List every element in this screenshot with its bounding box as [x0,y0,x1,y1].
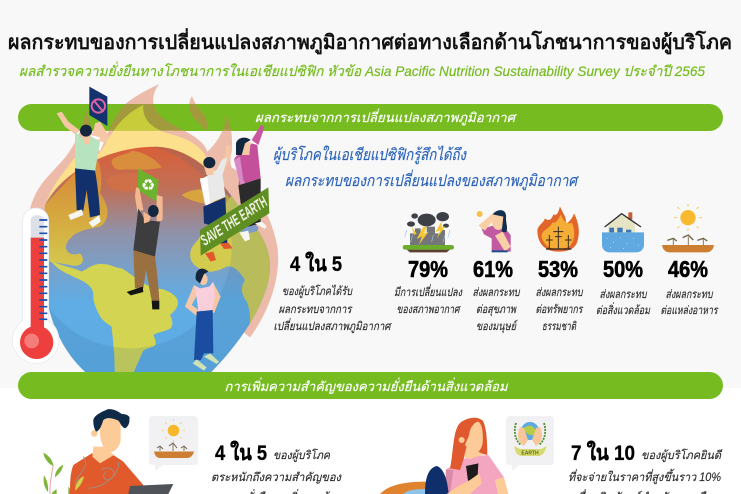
person: dark shirt with recycle sign [127,168,163,309]
stat: 50%: ต่อสิ่งแวดล้อม [596,302,651,317]
heading: consumers in Asia Pacific: ผลกระทบของการเปลี่ยนแปลงของสภาพภูมิอากาศ [285,169,579,191]
stat: 61%: ส่งผลกระทบ [472,287,521,299]
text: 7 in 10 willing to pay: 7 ใน 10 [571,440,635,465]
bubble: earth in hands: EARTH [521,450,539,456]
text: 4 in 5 aware: 4 ใน 5 [215,440,267,465]
icon: sun and dry crops [662,204,714,252]
person: pink top [185,269,221,371]
stat: 61% [472,256,521,333]
text: 4 in 5 aware: ของผู้บริโภค [273,448,331,462]
stat: 4 in 5: 4 ใน 5 [290,251,342,276]
person: magenta sweater [234,125,267,241]
bubble: dry crops [149,416,198,471]
stat: 61%: 61% [473,256,513,282]
person: green shirt with sign [57,87,109,227]
section banner: climate impact: ผลกระทบจากการเปลี่ยนแปลงสภาพภูมิอากาศ [255,108,518,126]
illustration: man with laptop and plant [43,409,173,494]
section banner: climate impact [18,104,723,131]
icon: forest fire [537,206,579,252]
bubble: earth in hands [506,416,554,471]
stat: 53% [536,256,584,333]
stat: 61%: ต่อสุขภาพ [476,304,517,316]
flames [29,84,278,337]
title: ผลกระทบของการเปลี่ยนแปลงสภาพภูมิอากาศต่อทางเลือกด้านโภชนาการของผู้บริโภค [8,27,732,56]
stat: 50%: 50% [603,256,643,282]
stat: 4 in 5: ผลกระทบจากการ [278,304,353,316]
stat: 50% [596,256,651,317]
text: 7 in 10 willing to pay [568,440,723,494]
text: 7 in 10 willing to pay: ที่จะจ่ายในราคาที่สูงขึ้นราว 10% [568,468,721,484]
stat: 46%: ส่งผลกระทบ [666,289,714,301]
illustration: burning globe with protesters [12,84,278,377]
stat: 46% [660,256,719,317]
icon: flooded house [602,212,644,252]
stat: 53%: 53% [538,256,578,282]
stat: 53%: ต่อทรัพยากร [536,303,584,316]
illustration: woman with phone on sofa [380,418,508,494]
text: 7 in 10 willing to pay: ของผู้บริโภคยินดี [641,448,723,462]
stat: 46%: 46% [668,256,708,282]
stat: 79%: ของสภาพอากาศ [396,304,461,316]
stat: 61%: ของมนุษย์ [476,319,518,333]
heading: consumers in Asia Pacific [273,145,579,191]
stat: 53%: ธรรมชาติ [542,320,577,333]
globe [44,146,270,372]
icon: person with headache [477,210,511,252]
text: 4 in 5 aware [211,440,343,494]
text: 4 in 5 aware: ตระหนักถึงความสำคัญของ [211,471,342,484]
person: dark shirt with recycle sign: ♻ [141,176,155,195]
stat: 79%: มีการเปลี่ยนแปลง [394,284,463,299]
stat: 79%: 79% [408,256,448,282]
stat: 50%: ส่งผลกระทบ [600,289,648,301]
banner: save the earth [198,187,271,256]
icon: storm city [403,212,454,252]
thermometer [12,208,59,363]
stat: 4 in 5 [274,251,392,333]
person: white shirt with orange shoes [200,145,233,262]
section banner: environmental sustainability [18,372,723,399]
stat: 4 in 5: เปลี่ยนแปลงสภาพภูมิอากาศ [274,318,392,333]
stat: 79% [394,256,463,316]
stat: 4 in 5: ของผู้บริโภคได้รับ [282,284,353,298]
banner: save the earth: SAVE THE EARTH [198,193,271,249]
heading: consumers in Asia Pacific: ผู้บริโภคในเอเชียแปซิฟิกรู้สึกได้ถึง [273,145,467,165]
section banner: environmental sustainability: การเพิ่มความสำคัญของความยั่งยืนด้านสิ่งแวดล้อม [224,377,509,394]
stat: 46%: ต่อแหล่งอาหาร [660,305,719,317]
subtitle: ผลสำรวจความยั่งยืนทางโภชนาการในเอเชียแปซิฟิก หัวข้อ Asia Pacific Nutrition Sustainability Survey ประจำปี 2565 [19,61,705,79]
stat: 53%: ส่งผลกระทบ [536,287,584,299]
